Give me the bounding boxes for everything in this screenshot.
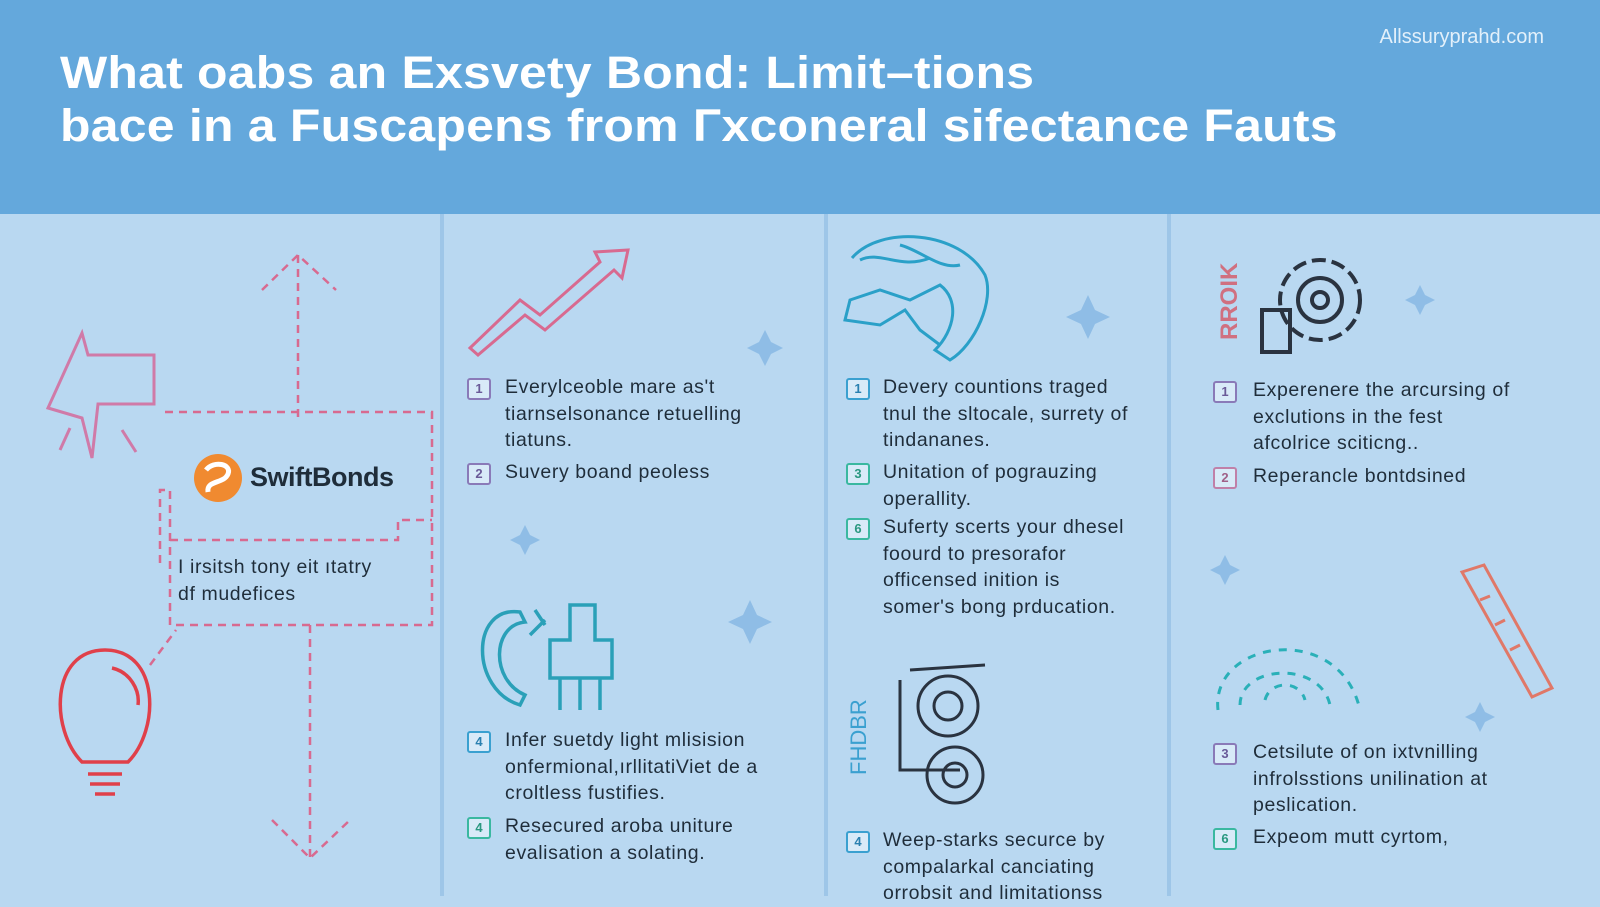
header band [0, 0, 1600, 214]
icon: brain head [845, 237, 988, 360]
text: Resecured aroba uniture [505, 815, 733, 837]
title: What oabs an Exsvety Bond: Limit–tions [60, 47, 1034, 98]
text: 4 [475, 820, 483, 835]
icon: gears [900, 665, 985, 803]
text: 6 [1221, 831, 1229, 846]
icon: trend line [470, 250, 628, 355]
icon: magnet [482, 605, 612, 710]
text: 4 [475, 734, 483, 749]
text: orrobsit and limitationss [883, 882, 1103, 904]
text: Expeom mutt cyrtom, [1253, 826, 1449, 848]
panel 3 text [846, 376, 1128, 904]
panel 1 text [178, 556, 372, 604]
text: tiatuns. [505, 429, 573, 451]
text: 3 [854, 466, 862, 481]
text: Experenere the arcursing of [1253, 379, 1510, 401]
panel 1 dashed arrows [150, 255, 432, 860]
icons and decorations: FHDBR [846, 699, 871, 775]
icon: ruler [1462, 565, 1552, 697]
text: officensed inition is [883, 569, 1060, 591]
text: tiarnselsonance retuelling [505, 402, 742, 424]
text: onfermional,ırllitatiViet de a [505, 756, 758, 778]
text: infrolsstions unilination at [1253, 768, 1488, 790]
text: evalisation a solating. [505, 842, 705, 864]
icon: gear [1262, 260, 1360, 352]
panel 1 text: I irsitsh tony eit ıtatry [178, 556, 372, 578]
panel 1 text: df mudefices [178, 582, 296, 604]
text: Reperancle bontdsined [1253, 465, 1466, 487]
vertical labels: RROIK [1216, 262, 1243, 340]
text: 2 [475, 466, 483, 481]
text: tindananes. [883, 429, 990, 451]
logo [194, 454, 242, 502]
icon: light bulb [60, 650, 150, 794]
text: peslication. [1253, 794, 1358, 816]
panel 4 text [1213, 379, 1510, 850]
text: foourd to presorafor [883, 542, 1066, 564]
text: afcolrice sciticng.. [1253, 432, 1419, 454]
text: Unitation of pograuzing [883, 461, 1097, 483]
text: Suferty scerts your dhesel [883, 516, 1124, 538]
column dividers [440, 214, 444, 896]
panel 2 text [467, 376, 758, 864]
text: 3 [1221, 746, 1229, 761]
text: tnul the sltocale, surrety of [883, 402, 1128, 424]
text: 1 [1221, 384, 1229, 399]
text: 4 [854, 834, 862, 849]
icon: arrow outline [48, 333, 154, 458]
text: Cetsilute of on ixtvnilling [1253, 741, 1478, 763]
text: 2 [1221, 470, 1229, 485]
text: operallity. [883, 488, 972, 510]
text: Everylceoble mare as't [505, 376, 715, 398]
text: Infer suetdy light mlisision [505, 729, 745, 751]
text: Suvery boand peoless [505, 461, 710, 483]
logo text: SwiftBonds [250, 462, 394, 492]
icon: dotted circle [1218, 650, 1360, 710]
text: 1 [475, 381, 483, 396]
text: Weep-starks securce by [883, 829, 1105, 851]
text: 6 [854, 521, 862, 536]
text: croltless fustifies. [505, 782, 665, 804]
text: 1 [854, 381, 862, 396]
text: exclutions in the fest [1253, 406, 1443, 428]
title [60, 47, 1338, 151]
watermark: Allssuryprahd.com [1379, 26, 1544, 48]
sparkles [510, 285, 1495, 732]
text: somer's bong prducation. [883, 596, 1116, 618]
text: Devery countions traged [883, 376, 1108, 398]
title: bace in a Fuscapens from Гxconeral sifectance Fauts [60, 100, 1338, 151]
text: compalarkal canciating [883, 856, 1095, 878]
